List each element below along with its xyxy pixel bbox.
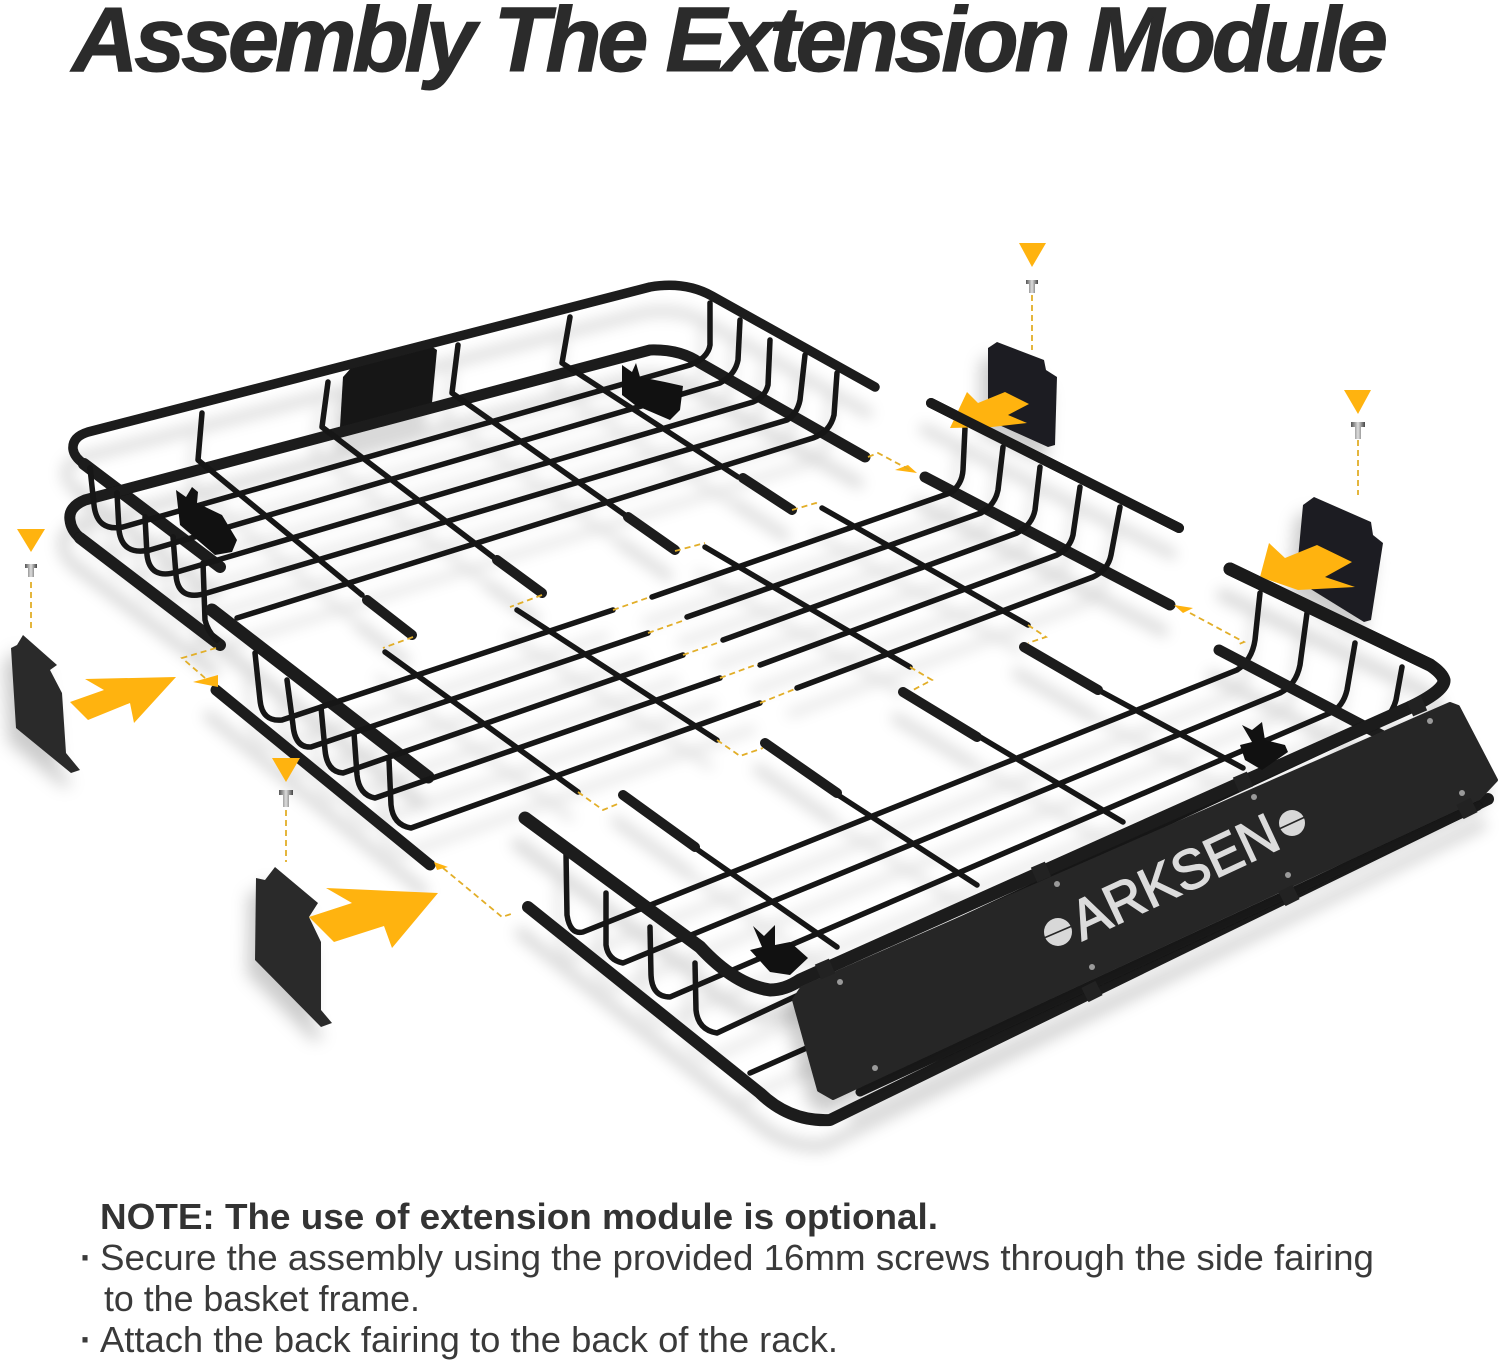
roof clamps [176,363,1288,975]
logo wordmark: ARKSEN [1060,801,1288,952]
screw: front right [1351,422,1365,439]
back fairing [794,704,1496,1098]
note line two: to the basket frame. [104,1278,420,1319]
rail re-draw in front of arrows and rear right panels [931,403,1430,665]
screw: rear left [25,564,37,577]
clamp: near right [1240,722,1288,770]
arrow: front right [1260,543,1355,590]
clamp: far left [176,487,237,555]
rack wire frame [70,285,1488,1120]
fairing screws [837,718,1465,1071]
rail sleeve joints [818,703,1474,995]
screw arrow: rear left [17,529,45,552]
arrow: rear right [950,392,1029,428]
logo left disc [1044,918,1072,946]
screw arrow: rear right [1019,243,1046,267]
panel: rear left [11,635,80,773]
screw: front left [279,790,293,807]
dashed assembly guide lines [31,295,1358,917]
screws [25,280,1365,807]
screw arrow: front right [1344,390,1371,414]
far mounting plate [340,342,437,427]
far basket section [70,285,875,645]
near basket section [525,569,1488,1120]
screw: rear right [1026,280,1038,293]
note heading: NOTE: The use of extension module is optional. [100,1196,938,1237]
bullet one: · [80,1237,92,1278]
clamp: near left [750,925,808,975]
arrow: rear left [70,677,176,723]
screw arrow: front left [272,758,300,782]
arrow: front left [309,888,438,948]
bullet two: · [80,1319,92,1360]
roof rack diagram [11,243,1496,1120]
panel: front left [255,867,332,1027]
note line three: Attach the back fairing to the back of the rack. [100,1319,838,1360]
logo right disc [1279,810,1305,836]
note line one: Secure the assembly using the provided 16mm screws through the side fairing [100,1237,1374,1278]
small connector arrowheads [193,465,1193,870]
middle basket section [212,403,1179,865]
brand logo [1044,801,1305,952]
panel: rear right [988,342,1057,447]
fairing plate [794,704,1496,1098]
panel: front right [1296,497,1383,622]
note text block [80,1196,1374,1360]
orange direction arrows [17,243,1371,948]
side fairing panels [11,342,1383,1027]
clamp: far right [622,363,683,420]
